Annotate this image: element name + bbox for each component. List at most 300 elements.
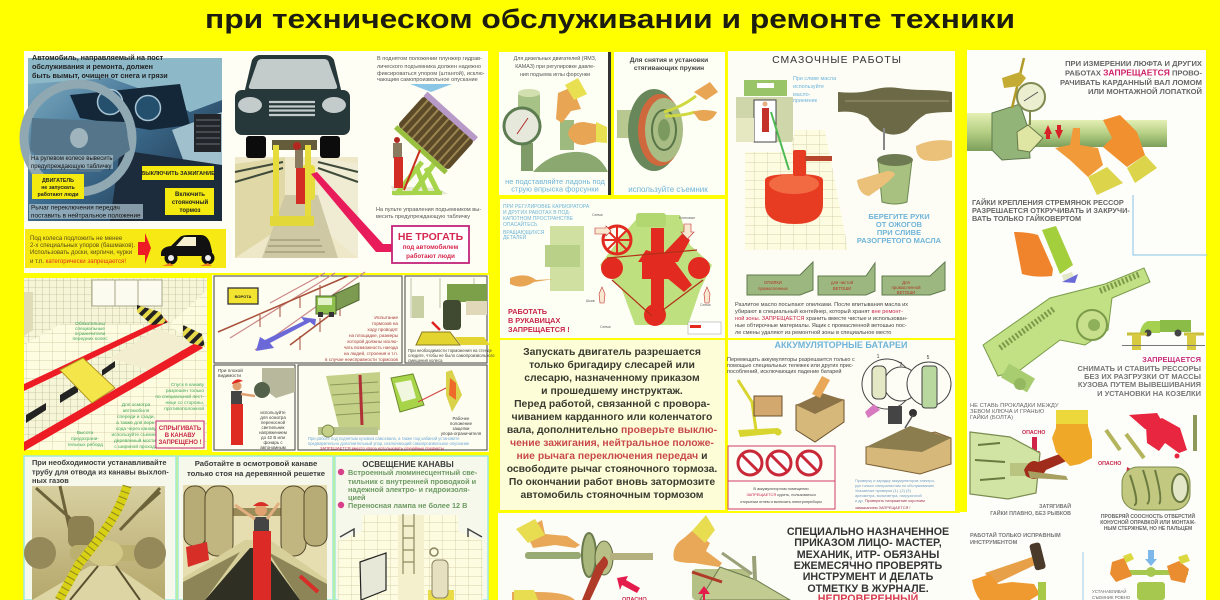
panel: pit lighting [335, 456, 488, 600]
green note: rim height: Высота [77, 430, 94, 436]
green note: rim height: предохрани- [71, 437, 99, 442]
control panel note: весить предупреждающую табличку [376, 214, 470, 220]
brake note: чать возможность наезда [344, 345, 398, 350]
red chock [186, 542, 209, 567]
shaft warning [1060, 59, 1202, 96]
charging note: ареометра, вольтметра, нагрузочной [855, 493, 922, 498]
panel: portable lamp: напряжением [259, 430, 287, 435]
engine diagram: Шкив [586, 299, 595, 303]
danger label and arrow [1098, 461, 1144, 480]
oil spill note: Разлитое масло посыпают опилками. После впитывания масла их [735, 302, 908, 308]
note: good tools: РАБОТАЙ ТОЛЬКО ИСПРАВНЫМ [970, 531, 1061, 539]
spring warning: КУЗОВА ПУТЕМ ВЫВЕШИВАНИЯ [1078, 380, 1201, 389]
dashboard caption: Автомобиль, направляемый на пост [32, 53, 164, 62]
engine diagram [586, 213, 721, 334]
panel: portable lamp: фонарь с [263, 440, 283, 445]
engine diagram: Схема [592, 213, 603, 217]
brake note: которой должны исклю- [347, 338, 398, 344]
green note: bridge: используйте съемный [111, 431, 161, 438]
warning: no jumping [156, 421, 204, 448]
tool inspection text [787, 526, 949, 600]
panel: engine start rules: Перед работой, связанной с провора- [514, 398, 710, 410]
note: use puller: используйте съемник [628, 185, 708, 194]
panel: batteries [727, 340, 955, 511]
panel: engine start rules: освободите рычаг стояночного тормоза. [507, 463, 717, 475]
pit walls [24, 322, 196, 442]
test labels: 2 [900, 362, 903, 368]
green note: descent: Спуск в канаву [171, 382, 205, 388]
warning: injector jet: струю впрыска форсунки [511, 184, 599, 194]
carburettor note: ОПАСАЙТЕСЬ [503, 220, 538, 228]
brake note: ходу проводят [367, 327, 399, 332]
green note: rim height: тельных реборд [67, 442, 103, 448]
spring warning: СНИМАТЬ И СТАВИТЬ РЕССОРЫ [1078, 364, 1201, 373]
shim warning: ЗЕВОМ КЛЮЧА И ГРАНЬЮ [970, 409, 1044, 415]
hand with wrench [512, 519, 653, 600]
note: good tools [970, 531, 1061, 546]
hoist note: чающим самопроизвольное опускание [377, 77, 478, 83]
oil spill note [735, 302, 908, 336]
hammer illustration [972, 542, 1046, 600]
icon: hands [556, 87, 581, 123]
panel: propeller shaft [967, 50, 1207, 517]
grate illustration [183, 485, 327, 600]
warning: gloves: В РУКАВИЦАХ [508, 316, 560, 325]
waste bins: для чистой [831, 280, 854, 285]
green note: bridge: Для осмотра [122, 402, 151, 408]
carrying note: Перемещать аккумуляторы разрешается только с [727, 357, 855, 363]
warning: burns: ПРИ СЛИВЕ [877, 228, 921, 237]
puller note [1092, 589, 1131, 600]
wheel chock strip: Использовать доски, кирпичи, чурки [30, 249, 132, 256]
dashboard caption: быть вымыт, очищен от снега и грязи [32, 71, 168, 80]
engine diagram: Клиновые [679, 216, 695, 220]
wheel sign note [29, 155, 113, 170]
test labels: 1 [877, 354, 880, 360]
engine diagram: Схема [600, 325, 611, 329]
panel: engine start rules: вала, дополнительно проверьте выклю- [507, 425, 718, 436]
brake note: на людей, строения и т.п. [344, 350, 398, 356]
warning: injector jet [505, 177, 606, 194]
green note: bridge: а также для пере- [116, 421, 156, 426]
panel: props for tipper and cab: положение [450, 421, 473, 426]
yellow hose [59, 486, 127, 600]
green note: descent: разрешен только [166, 389, 204, 394]
danger arrow: ОПАСНО [1022, 430, 1045, 436]
arrow: blue double [256, 317, 316, 351]
warning: gloves: ЗАПРЕЩАЕТСЯ ! [508, 325, 570, 334]
car front view [235, 55, 350, 158]
panel: portable lamp: светильник [262, 425, 285, 430]
panel: engine start rules: Запускать двигатель разрешается [523, 347, 701, 358]
engine diagram: Схема [700, 303, 711, 307]
note: check alignment [1100, 512, 1196, 532]
gear lever note [29, 204, 143, 220]
tool inspection text: ЕЖЕМЕСЯЧНО ПРОВЕРЯТЬ [794, 560, 943, 572]
springs heading [630, 57, 708, 72]
panel: engine start rules: ние рычага переключения передач и [517, 451, 707, 462]
road sign: ВОРОТА [235, 294, 251, 299]
panel: portable lamp [214, 365, 295, 450]
sign: parking brake [165, 188, 214, 215]
callout: do not touch: работают люди [406, 252, 455, 260]
figure: hoist mechanic [393, 137, 403, 188]
warning: burns: БЕРЕГИТЕ РУКИ [868, 212, 930, 221]
yellow plank [60, 358, 115, 403]
green note: bridge: с шириной прохода [114, 443, 158, 450]
road sign [228, 288, 258, 304]
green pit notes [73, 321, 108, 342]
control panel note [376, 207, 481, 220]
oil receiver [765, 112, 832, 224]
panel: engine start rules: чиванием карданного или коленчатого [512, 412, 712, 423]
warning: forbidden signs: ЗАПРЕЩАЕТСЯ курить, пользоваться [746, 492, 816, 497]
oil bucket and hands [857, 140, 952, 204]
wheel chock strip: и т.п. категорически запрещается! [30, 258, 126, 265]
carburettor note: ВРАЩАЮЩИХСЯ [503, 230, 545, 236]
panel: wooden grate [178, 456, 333, 600]
figure: mechanic [293, 142, 305, 204]
brake note: тормозов на [372, 321, 398, 326]
danger label and arrow: ОПАСНО [1098, 461, 1121, 467]
sign: engine: не запускать [41, 185, 76, 191]
sign: ignition [141, 166, 215, 180]
panel: carburettor and engine [500, 199, 725, 338]
oil spill note: ные обтирочные материалы. Ящик с промасленной ветошью пос- [735, 322, 907, 329]
tool inspection text: ИНСТРУМЕНТ И ДЕЛАТЬ [803, 571, 934, 583]
lighting list: Переносная лампа не более 12 В [348, 501, 467, 510]
carburettor sketch [510, 226, 584, 291]
green note: descent: нице со стороны, [166, 401, 204, 406]
icon: blue triangle [410, 84, 452, 92]
note: tighten smoothly: ГАЙКИ ПЛАВНО, БЕЗ РЫВКОВ [990, 509, 1071, 517]
divider: blue rule [1133, 195, 1207, 255]
hands on shaft [1055, 115, 1157, 195]
warning: injector jet: не подставляйте ладонь под [505, 177, 606, 186]
puller note: УСТАНАВЛИВАЙ [1092, 589, 1126, 594]
grate text [187, 459, 326, 478]
panel: lower right tools [960, 512, 1206, 600]
panel: props for tipper and cab: предварительно дополнительный упор, исключающий самопроизвольное опускание [308, 441, 470, 446]
spring nut note [972, 198, 1130, 223]
panel: brake test track [214, 272, 402, 363]
panel: portable lamp: автономным [260, 445, 286, 450]
danger arrow [1022, 430, 1045, 458]
warning: burns: РАЗОГРЕТОГО МАСЛА [857, 236, 942, 245]
test labels [877, 354, 930, 368]
panel: portable lamp: для осмотра [260, 415, 286, 420]
warning: no jumping: СПРЫГИВАТЬ [159, 426, 202, 432]
lighting list: цией [348, 493, 366, 502]
panel: truck on pit [405, 276, 495, 363]
gear lever note: Рычаг переключения передач [31, 204, 120, 212]
axle housing [838, 87, 952, 150]
battery with tools [865, 404, 951, 474]
spring nut note: ВАТЬ ТОЛЬКО ГАЙКОВЕРТОМ [972, 214, 1081, 223]
hoist note [377, 56, 485, 83]
charging note: рук только специалистам по обслуживанию [855, 483, 934, 488]
arrow: pink leader [311, 172, 392, 252]
green pit notes: Обязательны [75, 321, 105, 327]
green note: bridge: хода через канаву [116, 427, 157, 432]
green note: bridge: автомобиля [123, 408, 150, 414]
shaft warning: РАБОТАХ ЗАПРЕЩАЕТСЯ ПРОВО- [1065, 68, 1202, 78]
panel: portable lamp: до 42 В или [261, 435, 286, 440]
hoist note: фиксироваться упором (штангой), исклю- [377, 70, 485, 77]
panel: props for tipper and cab: При работе под поднятым кузовом самосвала, а также под кабиной установите [308, 436, 460, 441]
oil press note: При сливе масла [793, 76, 836, 82]
charging note [855, 478, 936, 510]
spring warning: БЕЗ ИХ РАЗГРУЗКИ ОТ МАССЫ [1084, 372, 1201, 381]
battery trolley [738, 380, 782, 437]
exhaust text: трубу для отвода из канавы выхлоп- [32, 468, 169, 476]
note: tighten smoothly [990, 502, 1071, 517]
green note: bridge: деревянный мостик [114, 437, 159, 444]
tool inspection text: МЕХАНИК, ИТР- ОБЯЗАНЫ [797, 549, 939, 561]
exhaust text [32, 458, 169, 485]
title heading: при техническом обслуживании и ремонте техники [205, 4, 1015, 34]
panel: portable lamp: видимости [218, 373, 241, 378]
panel: lubrication work [728, 51, 955, 338]
icon: red up arrow [698, 586, 710, 600]
panel: clutch springs [614, 52, 725, 195]
shaft warning: ИЛИ МОНТАЖНОЙ ЛОПАТКОЙ [1088, 87, 1202, 96]
carrying note [727, 357, 855, 375]
impact wrench and hand [1014, 226, 1078, 283]
springs heading: Для снятия и установки [630, 57, 708, 64]
oil spill note: ной зоны. ЗАПРЕЩАЕТСЯ хранить вместе чистые и использован- [735, 315, 908, 322]
exhaust illustration [24, 486, 166, 600]
charging note: и др. Проверять напряжение коротким [855, 498, 925, 503]
lighting list [338, 468, 478, 510]
icon: up-down arrows [1044, 125, 1063, 139]
dashboard photo [24, 53, 222, 221]
oil press note: приемник [793, 98, 818, 104]
injector illustration [504, 78, 608, 172]
lube heading: СМАЗОЧНЫЕ РАБОТЫ [772, 55, 902, 66]
battery box [796, 376, 844, 442]
injector note: КАМАЗ) при регулировке давле- [515, 64, 595, 70]
figure: mechanic with lamp [231, 379, 255, 445]
tool inspection text: ПРИКАЗОМ ЛИЦО- МАСТЕР, [794, 537, 942, 549]
brake note: в случае неисправности тормозов [325, 357, 399, 362]
carburettor note [503, 204, 590, 241]
shim warning: НЕ СТАВЬ ПРОКЛАДКИ МЕЖДУ [970, 403, 1059, 409]
note: check alignment: ПРОВЕРЯЙ СООСНОСТЬ ОТВЕРСТИЙ [1101, 512, 1196, 520]
truck [316, 283, 359, 317]
panel: exhaust pipe [24, 456, 176, 600]
warning: forbidden signs: открытым огнем и включать электроприборы [740, 499, 822, 504]
tilted vehicle on hoist [391, 92, 478, 196]
carburettor note: КАПОТНОМ ПРОСТРАНСТВЕ [503, 216, 574, 222]
panel: tool inspection [498, 513, 960, 600]
shim warning [970, 403, 1059, 421]
panel: engine start rules: По окончании работ вновь затормозите [509, 476, 715, 488]
test labels: 5 [927, 355, 930, 361]
waste bins: ВЕТОШИ [833, 286, 851, 291]
grate text: только стоя на деревянной решетке [187, 469, 326, 478]
panel: truck on pit: следите, чтобы не было самопроизвольного [408, 353, 495, 358]
lighting list: надежной электро- и гидроизоля- [348, 485, 470, 494]
green pit notes: специальные [75, 327, 105, 332]
waste bins: ОПИЛКИ [764, 280, 782, 285]
panel: diesel injector [499, 52, 611, 195]
sign: ignition: ВЫКЛЮЧИТЬ ЗАЖИГАНИЕ [141, 171, 215, 177]
waste bins: промасленной [891, 285, 921, 290]
panel: engine start rules: чение зажигания, нейтральное положе- [510, 438, 714, 449]
warning: burns [857, 212, 942, 245]
spring nut note: ГАЙКИ КРЕПЛЕНИЯ СТРЕМЯНОК РЕССОР [972, 198, 1124, 207]
carburettor note: И ДРУГИХ РАБОТАХ В ПОД- [503, 210, 571, 216]
green pit notes: ограничители [75, 332, 106, 337]
test circles [862, 359, 951, 409]
shaft warning: ПРИ ИЗМЕРЕНИИ ЛЮФТА И ДРУГИХ [1065, 59, 1202, 68]
warning: no jumping: В КАНАВУ [165, 433, 196, 439]
panel: preparing the vehicle [24, 51, 488, 273]
control panel note: На пульте управления подъемником вы- [376, 207, 481, 213]
dashboard caption: обслуживания и ремонта, должен [32, 62, 153, 71]
shaft illustration [967, 58, 1167, 195]
carrying note: пособлений, исключающих падение батарей [727, 368, 841, 375]
panel: engine start rules: автомобиль стояночным тормозом [521, 489, 703, 501]
warning: burns: ОТ ОЖОГОВ [876, 220, 923, 229]
sign: parking brake: тормоз [179, 208, 201, 214]
puller illustration [1110, 550, 1190, 600]
shaft warning: РАЧИВАТЬ КАРДАННЫЙ ВАЛ ЛОМОМ [1060, 78, 1202, 87]
arrow: red danger [617, 576, 640, 593]
brake note: на площадке, размеры [349, 333, 398, 338]
wheel sign note: На рулевом колесе вывесить [31, 156, 112, 162]
green note: bridge: спереди и сзади, [117, 415, 155, 420]
waste bins [747, 262, 945, 295]
carburettor note: ДЕТАЛЕЙ [503, 233, 527, 241]
oil spill note: убирают в специальный контейнер, который хранят вне ремонт- [735, 308, 903, 315]
gear lever note: поставить в нейтральное положение [31, 212, 141, 220]
puller note: СЪЕМНИК РОВНО [1092, 595, 1131, 600]
spring nut note: РАЗРЕШАЕТСЯ ОТКРУЧИВАТЬ И ЗАКРУЧИ- [972, 206, 1130, 215]
spring warning: ЗАПРЕЩАЕТСЯ [1142, 355, 1201, 364]
panel: portable lamp: При плохой [218, 367, 243, 373]
red hand danger [1106, 413, 1197, 458]
wheel chock strip: 2-х специальных упоров (башмаков). [30, 242, 135, 249]
lighting illustration [338, 514, 483, 600]
note: check alignment: НЫМ СТЕРЖНЕМ, НО НЕ ПАЛЬЦЕМ [1104, 526, 1192, 532]
oil press note: масло- [793, 92, 811, 98]
waste bins: Для [902, 280, 911, 285]
carrying note: помощью специальных тележек или других прис- [727, 363, 854, 369]
dial gauge [1002, 58, 1045, 125]
springs heading: стягивающих пружин [634, 65, 704, 72]
icon: black car [161, 235, 214, 266]
wheel chock strip: Под колеса подложить не менее [30, 235, 123, 242]
panel: props for tipper and cab [298, 365, 487, 450]
injector note [514, 55, 596, 78]
charging note: замыканием ЗАПРЕЩАЕТСЯ ! [855, 505, 910, 510]
callout: do not touch: под автомобилем [403, 243, 459, 251]
green note: rim height [67, 430, 103, 448]
sign: parking brake: стояночный [172, 199, 208, 206]
exhaust text: ных газов [32, 476, 69, 485]
truck on stands [1122, 320, 1205, 350]
spring warning: И УСТАНОВКИ НА КОЗЕЛКИ [1097, 389, 1201, 398]
lighting heading: ОСВЕЩЕНИЕ КАНАВЫ [362, 460, 454, 469]
warning: forbidden signs: В аккумуляторном помещении [753, 486, 809, 491]
green note: descent [155, 382, 205, 412]
waste bins: промасленные [758, 286, 788, 291]
panel: portable lamp: используйте [260, 410, 286, 415]
housing illustration [1122, 467, 1190, 510]
panel: engine start rules: только бригадиру слесарей или [529, 359, 695, 371]
hoist note: В поднятом положении плунжер гидрав- [377, 56, 482, 62]
hoist note: лического подъемника должен надежно [377, 64, 481, 70]
hand with puller [673, 515, 790, 600]
tile floor [745, 130, 848, 250]
injector note: Для дизельных двигателей (ЯМЗ, [514, 55, 596, 62]
figure: pit worker [235, 502, 279, 600]
carburettor note: ПРИ РЕГУЛИРОВКЕ КАРБЮРАТОРА [503, 204, 590, 210]
note: good tools: ИНСТРУМЕНТОМ [970, 540, 1018, 546]
clutch illustration [617, 82, 718, 171]
charging note: Указанные проверки (1) ,(2) (3) [855, 488, 911, 493]
icon: red arrow [138, 233, 151, 264]
brake note: Испытание [374, 315, 398, 320]
brake note [325, 315, 399, 362]
charging note: Проверку и зарядку аккумуляторов электро- [855, 478, 936, 483]
wrench illustration [970, 410, 1092, 499]
batteries heading: АККУМУЛЯТОРНЫЕ БАТАРЕИ [774, 340, 908, 350]
tool inspection text: ОТМЕТКУ В ЖУРНАЛЕ. [807, 583, 929, 595]
pale backing for diagrams [212, 275, 489, 452]
note: tighten smoothly: ЗАТЯГИВАЙ [1039, 502, 1071, 510]
leaf spring axle [983, 268, 1150, 392]
panel: engine start rules: слесарю, назначенному приказом [524, 373, 700, 384]
pit diagram [736, 80, 793, 142]
panel: props for tipper and cab: ЗАПРЕЩАЕТСЯ вместо упора использовать случайные предметы [320, 446, 444, 450]
wheel sign note: предупреждающую табличку [31, 164, 112, 170]
grate text: Работайте в осмотровой канаве [195, 459, 318, 468]
callout: do not touch: НЕ ТРОГАТЬ [398, 231, 464, 243]
wheel chock strip [25, 229, 226, 268]
warning: forbidden signs [728, 446, 835, 509]
exhaust text: При необходимости устанавливайте [32, 458, 166, 467]
lighting list: Встроенный люминесцентный све- [348, 468, 478, 477]
green note: descent: по специальной лест- [155, 393, 204, 400]
red stripes [24, 318, 168, 391]
warning: gloves [508, 307, 570, 334]
sign: parking brake: Включить [175, 192, 205, 198]
spring warning [1078, 355, 1201, 398]
panel: engine start rules: и прошедшему инструктаж. [541, 386, 683, 397]
oil press note [793, 76, 836, 104]
panel: truck on pit: смещения колеса [408, 358, 443, 363]
sign: engine: работают люди [38, 191, 78, 198]
tool inspection text: СПЕЦИАЛЬНО НАЗНАЧЕННОЕ [787, 526, 949, 538]
warning: gloves: РАБОТАТЬ [508, 307, 547, 316]
green note: descent: противоположной [164, 405, 204, 412]
green note: bridge [111, 402, 161, 450]
panel: props for tipper and cab: защелки [453, 426, 470, 431]
green pit notes: передних колес [73, 337, 108, 342]
panel: engine start rules [500, 340, 725, 510]
panel: portable lamp: переносной [261, 420, 286, 425]
oil press note: используйте [793, 83, 824, 90]
lighting list: тильник с внутренней проводкой и [348, 477, 476, 486]
lift pit illustration [235, 140, 358, 258]
waste bins: ВЕТОШИ [897, 290, 915, 295]
note: check alignment: КОНУСНОЙ ОПРАВКОЙ ИЛИ МОНТАЖ- [1100, 518, 1196, 526]
warning: no jumping: ЗАПРЕЩЕНО ! [158, 440, 202, 446]
oil spill note: ле смены удаляют из ремонтной зоны в специальное место [735, 329, 891, 336]
